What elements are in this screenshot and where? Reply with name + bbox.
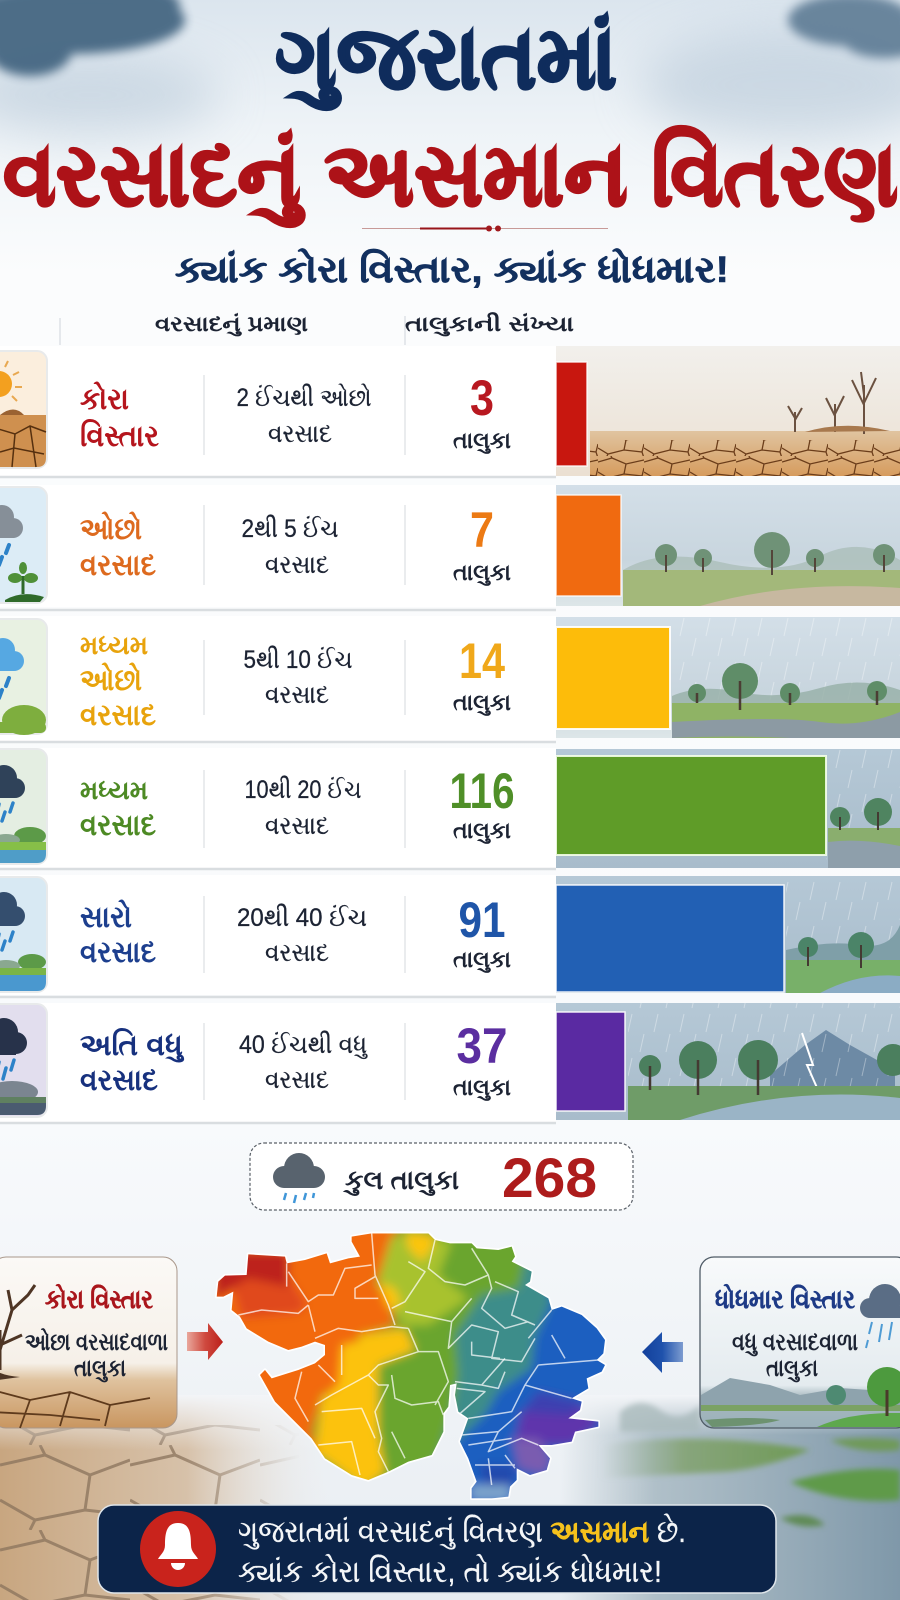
taluka count: 7: [470, 502, 494, 558]
bar: 37 talukas: [556, 1012, 625, 1111]
category label: [80, 775, 156, 842]
card text: તાલુકા: [74, 1355, 126, 1382]
bar: 91 talukas: [556, 885, 784, 992]
taluka count: 116: [450, 763, 514, 819]
taluka count: તાલુકા: [453, 689, 511, 716]
category label: [80, 381, 159, 453]
table header: [60, 312, 574, 345]
rainfall range: વરસાદ: [265, 681, 329, 709]
taluka count: [450, 763, 514, 844]
bar: 14 talukas: [556, 627, 670, 729]
landscape: dry cracked land: [556, 346, 900, 476]
card heading: કોરા વિસ્તાર: [45, 1284, 153, 1314]
bar: 116 talukas: [556, 756, 826, 855]
taluka count: 91: [458, 892, 506, 948]
map of Gujarat: [215, 1232, 606, 1500]
landscape: moderate rain field: [556, 749, 900, 868]
card heading: ધોધમાર વિસ્તાર: [715, 1284, 855, 1314]
rainfall range: 10થી 20 ઈંચ: [244, 776, 362, 804]
category label: વરસાદ: [80, 1064, 158, 1097]
title: [3, 8, 898, 228]
icon: dark cloud with pond: [0, 749, 47, 864]
icon: rain cloud: [273, 1153, 325, 1203]
card text: ઓછા વરસાદવાળા: [25, 1327, 168, 1356]
taluka count: [453, 633, 511, 716]
category label: ઓછો: [80, 662, 142, 697]
callout text: ગુજરાતમાં વરસાદનું વિતરણ અસમાન છે.: [238, 1514, 686, 1549]
rainfall range: 40 ઈંચથી વધુ: [239, 1031, 368, 1059]
category label: સારો: [80, 899, 132, 934]
card text: તાલુકા: [766, 1355, 818, 1382]
rainfall range: [244, 646, 352, 709]
bottom background: dry earth to flood: [0, 1395, 900, 1600]
panel: row 5 good rain: [0, 875, 900, 997]
category label: [80, 1028, 184, 1097]
landscape: light rain plain: [556, 485, 900, 606]
rainfall range: [244, 776, 362, 840]
title line 1: ગુજરાતમાં: [275, 8, 617, 111]
category label: વિસ્તાર: [80, 419, 159, 453]
taluka count: તાલુકા: [453, 817, 511, 844]
card text: [25, 1327, 168, 1382]
rainfall range: વરસાદ: [265, 551, 329, 579]
rainfall range: વરસાદ: [265, 812, 329, 840]
taluka count: 3: [470, 370, 494, 426]
bar: 7 talukas: [556, 495, 621, 596]
landscape: good rain valley: [556, 876, 900, 993]
icon: sun and cracked earth: [0, 351, 47, 468]
rainfall range: 2થી 5 ઈંચ: [242, 515, 338, 543]
dry cracked earth: [0, 1402, 298, 1600]
category label: મધ્યમ: [80, 630, 148, 660]
category label: વરસાદ: [80, 549, 156, 582]
category label: કોરા: [80, 381, 129, 416]
taluka count: તાલુકા: [453, 1074, 511, 1101]
category label: ઓછો: [80, 511, 142, 546]
category label: [80, 899, 156, 969]
total label: કુલ તાલુકા: [342, 1165, 459, 1196]
category label: વરસાદ: [80, 809, 156, 842]
icon: storm cloud: [0, 1004, 47, 1117]
landscape: storm with lightning: [556, 1003, 900, 1120]
callout text: ક્યાંક કોરા વિસ્તાર, તો ક્યાંક ધોધમાર!: [238, 1554, 662, 1589]
rainfall range: [239, 1031, 368, 1094]
icon: bell: [140, 1511, 216, 1587]
rainfall range: [237, 904, 367, 967]
card photo: dead tree and cracked earth: [0, 1285, 150, 1428]
panel: row 2 low rain: [0, 485, 900, 610]
category label: અતિ વધુ: [80, 1028, 184, 1063]
rainfall range: [236, 384, 372, 448]
taluka count: [453, 1018, 511, 1101]
category label: [80, 511, 156, 582]
taluka count: તાલુકા: [453, 559, 511, 586]
category label: મધ્યમ: [80, 775, 148, 805]
icon: rain cloud over lake: [0, 877, 47, 992]
callout banner: [98, 1505, 776, 1593]
taluka count: 14: [459, 633, 505, 689]
arrow: red right: [187, 1323, 223, 1360]
rainfall range: 2 ઈંચથી ઓછો: [236, 384, 372, 412]
taluka count: [453, 370, 511, 454]
rainfall range: [242, 515, 338, 579]
bar: 3 talukas: [556, 362, 587, 466]
card text: વધુ વરસાદવાળા: [732, 1329, 858, 1356]
card: dry area: [0, 1257, 177, 1428]
header: taluka count: તાલુકાની સંખ્યા: [405, 312, 574, 337]
rainfall range: 5થી 10 ઈંચ: [244, 646, 352, 674]
background: storm clouds: [0, 0, 900, 140]
rainfall range: વરસાદ: [265, 1066, 329, 1094]
panel: row 3 moderately low rain: [0, 616, 900, 742]
header: rainfall amount: વરસાદનું પ્રમાણ: [155, 313, 308, 337]
title ornament: [362, 226, 608, 232]
category label: વરસાદ: [80, 936, 156, 969]
total number: 268: [502, 1146, 597, 1209]
panel: row 6 very heavy rain: [0, 1003, 900, 1123]
taluka count: [453, 502, 511, 586]
icon: cloud with shrub: [0, 619, 47, 735]
rainfall range: વરસાદ: [268, 420, 332, 448]
flooded plain: [560, 1395, 900, 1600]
taluka count: તાલુકા: [453, 427, 511, 454]
panel: row 4 moderate rain: [0, 748, 900, 869]
landscape: rain meadow: [556, 617, 900, 738]
total talukas box: [250, 1143, 633, 1210]
callout text: [238, 1514, 686, 1589]
category label: [80, 630, 156, 732]
taluka count: [453, 892, 511, 973]
subtitle: ક્યાંક કોરા વિસ્તાર, ક્યાંક ધોધમાર!: [175, 247, 729, 290]
rainfall range: વરસાદ: [265, 939, 329, 967]
card photo: lake and trees: [701, 1367, 900, 1427]
taluka count: તાલુકા: [453, 946, 511, 973]
icon: cloud with sapling: [0, 487, 47, 603]
card: flood area: [700, 1257, 900, 1428]
icon: cloud with rain: [860, 1284, 900, 1348]
category label: વરસાદ: [80, 699, 156, 732]
card text: [732, 1329, 858, 1382]
panel: row 1 dry area: [0, 346, 900, 477]
arrow: blue left: [642, 1332, 683, 1373]
rainfall range: 20થી 40 ઈંચ: [237, 904, 367, 932]
taluka count: 37: [456, 1018, 508, 1074]
